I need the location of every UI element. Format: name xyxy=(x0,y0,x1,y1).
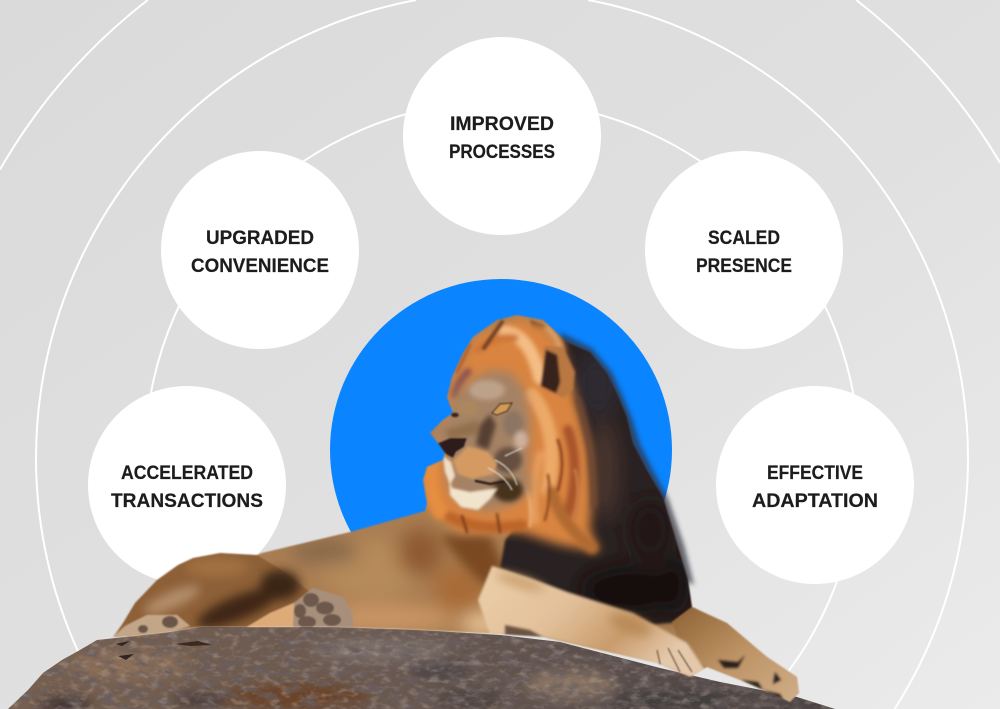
ear shadow xyxy=(541,350,560,393)
mane dark patches xyxy=(575,353,689,615)
hind leg xyxy=(246,602,295,628)
circle: effective adaptation: EFFECTIVE xyxy=(767,462,863,484)
rock texture xyxy=(8,620,840,709)
haunch shading xyxy=(141,557,300,636)
circle: scaled presence: SCALED xyxy=(708,227,780,249)
circle: accelerated transactions: ACCELERATED xyxy=(121,462,253,484)
nose xyxy=(438,438,467,458)
eye xyxy=(492,403,512,415)
mane shadow glow xyxy=(560,332,694,585)
cheek white xyxy=(443,456,455,484)
arm shading xyxy=(494,569,653,640)
circle: effective adaptation xyxy=(716,386,914,584)
mouth xyxy=(476,481,506,484)
circle: improved processes: IMPROVED xyxy=(450,113,554,135)
mane dark base xyxy=(500,320,700,625)
circle: effective adaptation: ADAPTATION xyxy=(752,490,878,512)
face patches xyxy=(445,380,528,502)
orange mane base xyxy=(424,318,600,552)
rear arm xyxy=(672,607,799,702)
front paw claws xyxy=(657,648,692,672)
rock base xyxy=(8,627,835,709)
muzzle xyxy=(453,446,497,479)
hind paw pads xyxy=(294,593,341,628)
lion xyxy=(100,300,810,709)
circle: scaled presence xyxy=(645,151,843,349)
whiskers xyxy=(488,448,522,490)
lower paw toes xyxy=(138,616,178,633)
circle: upgraded convenience xyxy=(161,151,359,349)
fine strands xyxy=(457,322,578,532)
body colour patches xyxy=(291,528,509,636)
circle: accelerated transactions: TRANSACTIONS xyxy=(111,490,263,512)
rock xyxy=(8,620,840,709)
haunch xyxy=(113,553,310,640)
circle: upgraded convenience: CONVENIENCE xyxy=(191,255,329,277)
hind paw base xyxy=(293,588,353,628)
mane fur strands xyxy=(431,328,594,548)
hind paw xyxy=(293,588,353,628)
arm pit xyxy=(505,625,543,637)
ear xyxy=(544,346,575,398)
circle: upgraded convenience: UPGRADED xyxy=(206,227,314,249)
far eye xyxy=(451,412,459,418)
face base xyxy=(431,370,532,512)
neck shadow xyxy=(440,535,505,590)
rear paw toes xyxy=(718,655,784,701)
lion base xyxy=(100,300,810,709)
circle: improved processes xyxy=(403,37,601,235)
blue circle xyxy=(330,279,672,621)
chin xyxy=(449,478,498,510)
circle: accelerated transactions xyxy=(88,386,286,584)
rear lower paw xyxy=(113,615,190,637)
front arm xyxy=(478,566,705,677)
circle: improved processes: PROCESSES xyxy=(449,141,555,163)
circle: scaled presence: PRESENCE xyxy=(696,255,792,277)
